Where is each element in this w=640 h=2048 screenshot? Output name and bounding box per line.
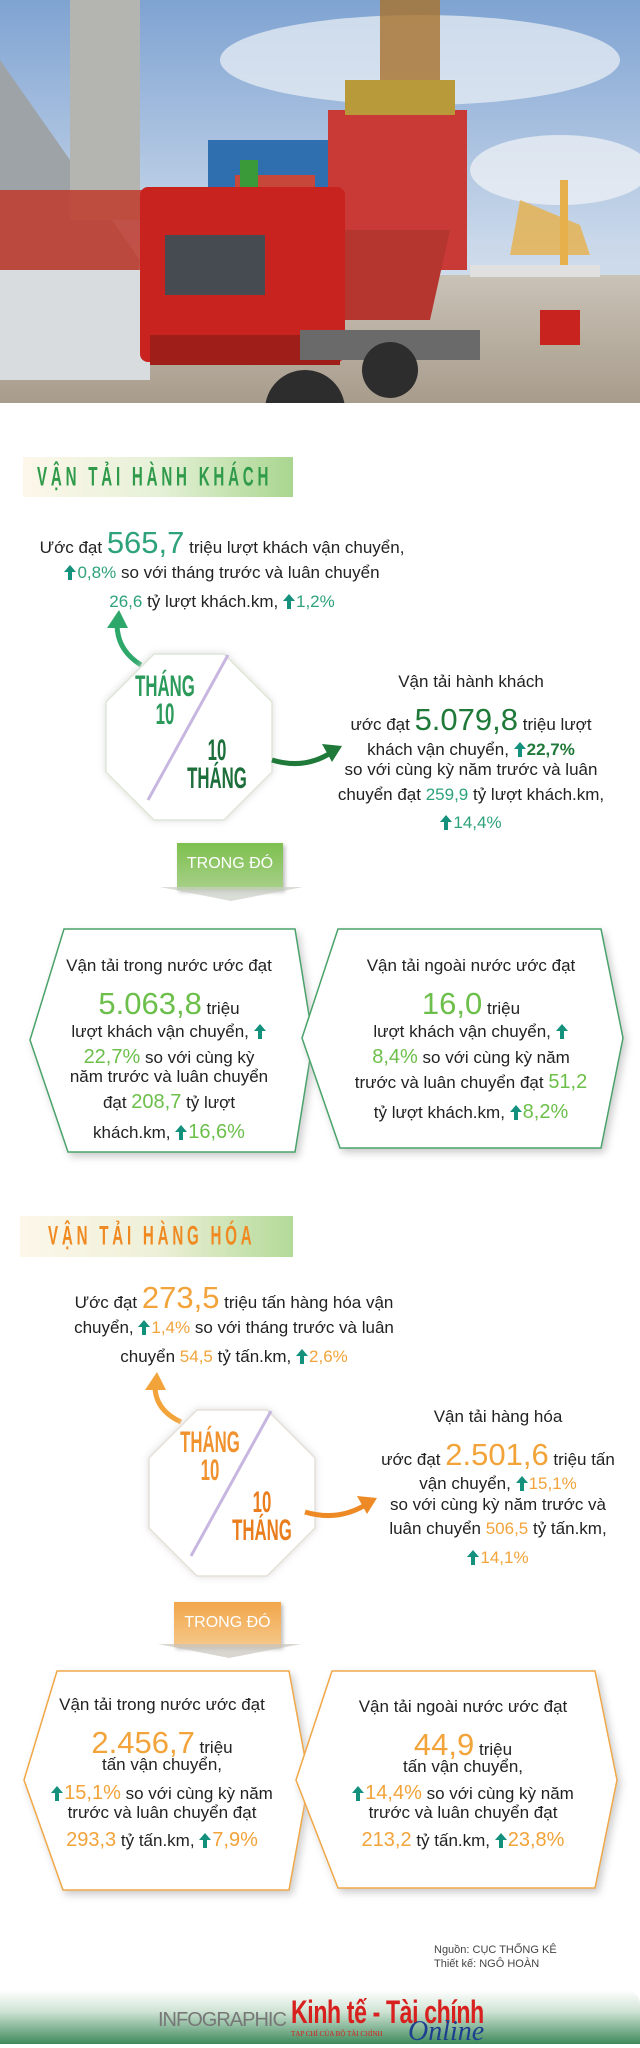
footer logo text: Online xyxy=(408,2016,484,2047)
text block: monthly passenger xyxy=(40,525,404,611)
panel: domestic passenger xyxy=(29,928,314,1160)
text block: 10-month passenger: 14,4% xyxy=(453,813,502,832)
panel: domestic goods: Vận tải trong nước ước đạt xyxy=(59,1695,265,1714)
panel: foreign passenger: Vận tải ngoài nước ước đạt xyxy=(367,956,575,975)
panel: domestic goods: trước và luân chuyển đạt xyxy=(68,1803,256,1822)
octagon: passenger month/10 months: 10 xyxy=(208,734,226,766)
text block: monthly goods: Ước đạt 273,5 triệu tấn hàng hóa vận xyxy=(75,1280,393,1315)
source credits: Thiết kế: NGÔ HOÀN xyxy=(434,1958,539,1970)
octagon: passenger month/10 months: THÁNG xyxy=(135,670,195,702)
footer logo text: TẠP CHÍ CỦA BỘ TÀI CHÍNH xyxy=(291,2030,383,2038)
panel: domestic passenger: 22,7% so với cùng kỳ xyxy=(84,1046,254,1068)
octagon: goods month/10 months: 10 xyxy=(201,1454,219,1486)
source credits: Nguồn: CỤC THỐNG KÊ xyxy=(434,1944,557,1956)
panel: foreign goods: 14,4% so với cùng kỳ năm xyxy=(365,1782,574,1804)
text block: 10-month goods: 14,1% xyxy=(480,1548,529,1567)
text block: 10-month goods: vận chuyển, 15,1% xyxy=(419,1474,577,1493)
text block: 10-month passenger xyxy=(338,672,604,832)
arrow: to monthly goods text xyxy=(145,1372,182,1424)
label: trong đó (passenger) xyxy=(160,842,302,901)
panel: foreign passenger: tỷ lượt khách.km, 8,2% xyxy=(374,1101,568,1123)
panel: domestic passenger: Vận tải trong nước ước đạt xyxy=(66,956,272,975)
panel: domestic goods xyxy=(23,1670,310,1898)
text block: monthly goods: chuyển 54,5 tỷ tấn.km, 2,6% xyxy=(120,1347,348,1366)
text block: 10-month goods xyxy=(381,1407,615,1567)
arrow: to monthly text xyxy=(107,610,142,667)
label: trong đó (goods): TRONG ĐÓ xyxy=(184,1614,271,1631)
label: trong đó (passenger): TRONG ĐÓ xyxy=(187,855,273,872)
panel: foreign goods: Vận tải ngoài nước ước đạt xyxy=(359,1697,567,1716)
panel: domestic goods: 293,3 tỷ tấn.km, 7,9% xyxy=(66,1829,258,1851)
panel: foreign goods: 213,2 tỷ tấn.km, 23,8% xyxy=(362,1829,564,1851)
panel: foreign goods: 44,9 triệu xyxy=(414,1727,512,1762)
panel: domestic passenger: khách.km, 16,6% xyxy=(93,1121,245,1143)
footer logo text: Kinh tế - Tài chính xyxy=(291,1994,484,2030)
octagon: goods month/10 months: THÁNG xyxy=(180,1426,240,1458)
footer logo text xyxy=(158,1994,484,2047)
panel: foreign passenger: trước và luân chuyển đạt 51,2 xyxy=(355,1071,587,1093)
arrow: to 10-month goods text xyxy=(304,1496,377,1518)
title: passenger transport xyxy=(23,457,293,497)
panel: foreign passenger: 8,4% so với cùng kỳ năm xyxy=(372,1046,570,1068)
footer banner xyxy=(0,1990,640,2044)
text block: 10-month goods: Vận tải hàng hóa xyxy=(434,1407,562,1426)
panel: foreign goods: trước và luân chuyển đạt xyxy=(369,1803,557,1822)
text block: monthly passenger: 26,6 tỷ lượt khách.km, 1,2% xyxy=(109,592,335,611)
panel: foreign goods: tấn vận chuyển, xyxy=(403,1757,523,1776)
text block: monthly goods: chuyển, 1,4% so với tháng trước và luân xyxy=(74,1318,394,1337)
text block: monthly passenger: Ước đạt 565,7 triệu lượt khách vận chuyển, xyxy=(40,525,404,560)
text block: 10-month goods: ước đạt 2.501,6 triệu tấn xyxy=(381,1437,615,1472)
text block: 10-month goods: luân chuyển 506,5 tỷ tấn.km, xyxy=(389,1519,607,1538)
title: goods transport: VẬN TẢI HÀNG HÓA xyxy=(48,1222,255,1251)
panel: foreign passenger xyxy=(301,928,630,1156)
photo: port truck xyxy=(0,0,640,403)
octagon: goods month/10 months: THÁNG xyxy=(232,1514,292,1546)
panel: domestic goods: 15,1% so với cùng kỳ năm xyxy=(64,1782,273,1804)
octagon: passenger month/10 months xyxy=(102,650,276,824)
panel: domestic goods: tấn vận chuyển, xyxy=(102,1755,222,1774)
text block: 10-month passenger: ước đạt 5.079,8 triệu lượt xyxy=(350,702,592,737)
panel: domestic goods: 2.456,7 triệu xyxy=(91,1725,233,1760)
text block: monthly passenger: 0,8% so với tháng trước và luân chuyển xyxy=(77,563,380,582)
text block: 10-month passenger: chuyển đạt 259,9 tỷ lượt khách.km, xyxy=(338,785,604,804)
label: trong đó (goods) xyxy=(158,1602,300,1658)
panel: domestic passenger: lượt khách vận chuyển, xyxy=(71,1022,249,1041)
panel: domestic passenger: đạt 208,7 tỷ lượt xyxy=(103,1091,235,1113)
text block: 10-month passenger: so với cùng kỳ năm trước và luân xyxy=(345,760,597,779)
text block: 10-month passenger: Vận tải hành khách xyxy=(398,672,544,691)
panel: foreign goods xyxy=(295,1670,624,1896)
source credits xyxy=(434,1943,557,1970)
panel: domestic passenger: năm trước và luân chuyển xyxy=(70,1067,268,1086)
footer logo text: INFOGRAPHIC xyxy=(158,2009,286,2031)
octagon: passenger month/10 months: THÁNG xyxy=(187,762,247,794)
panel: foreign passenger: lượt khách vận chuyển, xyxy=(373,1022,551,1041)
panel: foreign passenger: 16,0 triệu xyxy=(422,986,520,1021)
title: goods transport xyxy=(20,1216,293,1257)
text block: 10-month passenger: khách vận chuyển, 22,7% xyxy=(367,740,575,759)
arrow: to 10-month text xyxy=(271,744,342,766)
text block: monthly goods xyxy=(74,1280,394,1366)
octagon: goods month/10 months: 10 xyxy=(253,1486,271,1518)
octagon: passenger month/10 months: 10 xyxy=(156,698,174,730)
octagon: goods month/10 months xyxy=(146,1406,318,1580)
panel: domestic passenger: 5.063,8 triệu xyxy=(98,986,240,1021)
text block: 10-month goods: so với cùng kỳ năm trước và xyxy=(390,1495,606,1514)
title: passenger transport: VẬN TẢI HÀNH KHÁCH xyxy=(37,463,272,492)
